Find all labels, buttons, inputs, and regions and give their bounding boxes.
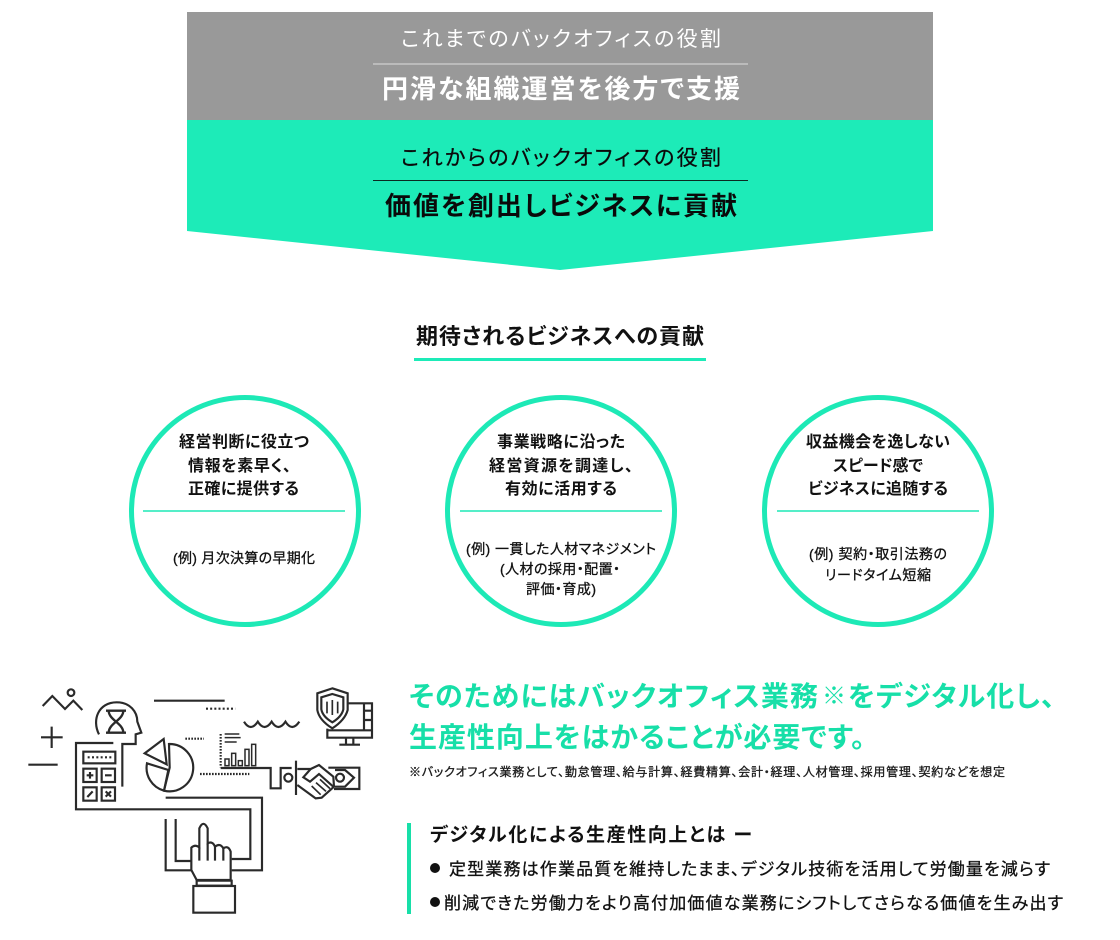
bullet 2: 削減できた労働力をより高付加価値な業務にシフトしてさらなる価値を生み出す (444, 894, 1063, 913)
icon: pie chart (145, 739, 193, 791)
section heading (414, 324, 706, 361)
heading: previous role statement: 円滑な組織運営を後方で支援 (382, 74, 740, 104)
icon: minus (28, 761, 58, 768)
panel: circle 3 (764, 398, 992, 624)
panel: circle 2 (448, 398, 674, 624)
bullet 1: 定型業務は作業品質を維持したまま、デジタル技術を活用して労働量を減らす (449, 859, 1050, 879)
footnote: ※バックオフィス業務として、勤怠管理、給与計算、経費精算、会計・経理、人材管理、採用管理、契約などを想定 (409, 764, 1005, 779)
icon: waves (244, 722, 299, 727)
icon: plus (41, 727, 63, 748)
panel: circle 1: 情報を素早く、 (188, 456, 291, 475)
panel: circle 2: (人材の採用・配置・ (500, 561, 620, 577)
text block: productivity definition (430, 823, 1063, 913)
accent bar (407, 823, 411, 914)
panel: circle 3: リードタイム短縮 (825, 567, 931, 583)
text block: productivity definition: デジタル化による生産性向上とは ー (430, 823, 752, 846)
headline: ※ (822, 683, 846, 710)
panel: circle 2: 評価・育成) (526, 581, 596, 597)
panel: circle 3: (例) 契約・取引法務の (809, 546, 947, 562)
heading: future role statement: 価値を創出しビジネスに貢献 (385, 191, 737, 221)
icon: mountain and sun (43, 689, 82, 710)
icon: calculator (76, 743, 250, 859)
panel: circle 1: 正確に提供する (188, 479, 299, 498)
panel: circle 2: 事業戦略に沿った (497, 432, 625, 451)
panel: circle 1: (例) 月次決算の早期化 (173, 550, 315, 566)
panel: circle 2: 経営資源を調達し、 (489, 456, 633, 475)
panel: previous role (187, 12, 933, 120)
icon: head with hourglass (96, 702, 141, 787)
illustration: digital back office line art (28, 688, 372, 913)
heading: future role label: これからのバックオフィスの役割 (401, 147, 721, 170)
panel: circle 2: 有効に活用する (505, 480, 617, 498)
headline (409, 680, 1055, 753)
icon: shield and monitor (317, 688, 372, 745)
dotted lines (185, 739, 249, 774)
headline: をデジタル化し、 (848, 680, 1055, 712)
panel: circle 3: ビジネスに追随する (808, 479, 948, 498)
panel: circle 3: スピード感で (833, 456, 923, 475)
section heading: 期待されるビジネスへの貢献 (416, 324, 704, 349)
icon: bar chart (221, 734, 292, 788)
panel: circle 1 (132, 398, 358, 624)
icon: handshake and banknote (296, 761, 359, 798)
icon: pointing hand (166, 798, 262, 913)
headline: そのためにはバックオフィス業務 (409, 681, 818, 712)
panel: future role arrow (187, 120, 933, 270)
line and dots (154, 697, 225, 704)
headline: 生産性向上をはかることが必要です。 (409, 721, 865, 753)
panel: circle 2: (例) 一貫した人材マネジメント (466, 541, 656, 557)
heading: previous role label: これまでのバックオフィスの役割 (401, 28, 721, 51)
panel: circle 3: 収益機会を逸しない (806, 432, 950, 451)
panel: circle 1: 経営判断に役立つ (179, 432, 309, 451)
